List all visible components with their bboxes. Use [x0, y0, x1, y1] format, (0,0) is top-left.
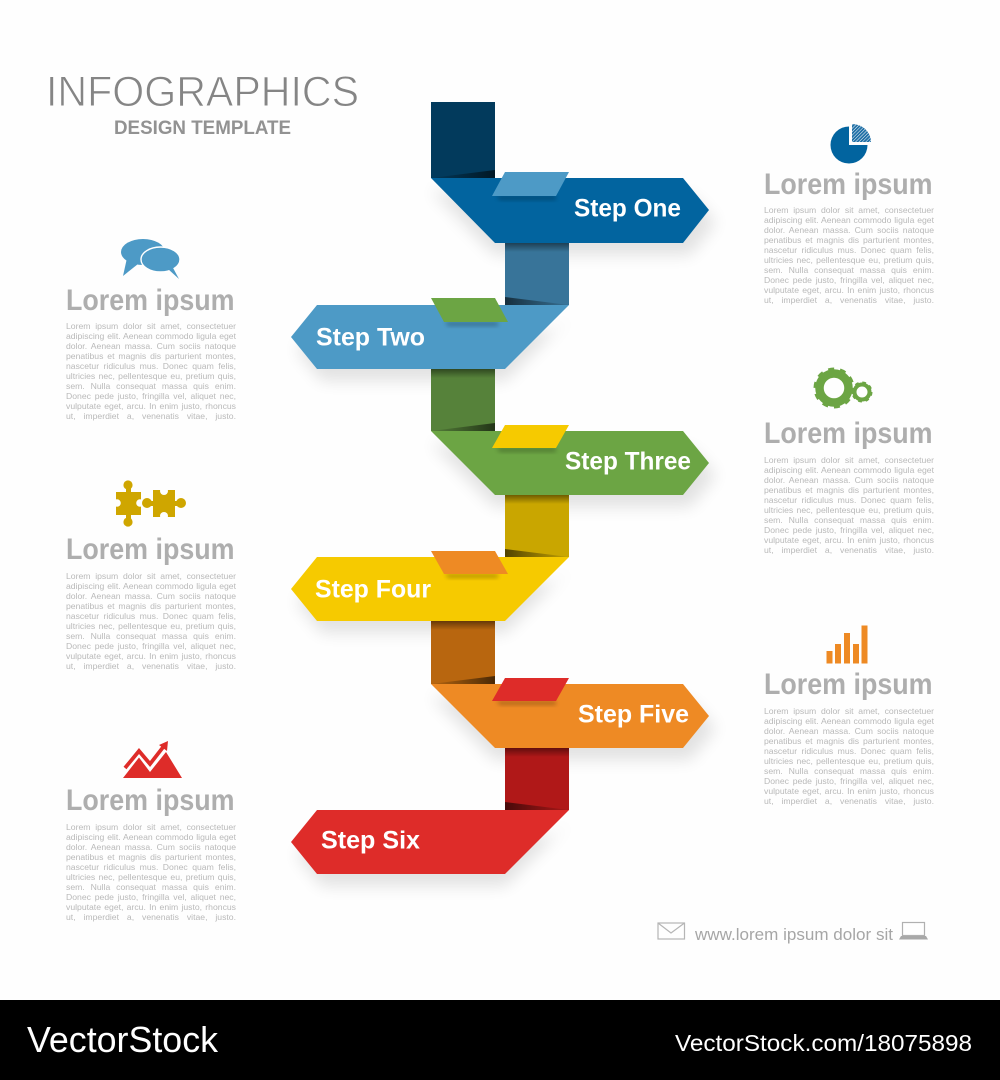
body text: dolor. Aenean massa. Cum sociis natoque	[66, 591, 236, 601]
panel: right block two	[764, 417, 934, 555]
body text: Donec pede justo, fringilla vel, aliquet nec,	[66, 391, 236, 401]
icon: gears	[816, 370, 871, 406]
heading: Lorem ipsum	[764, 168, 933, 201]
body text: penatibus et magnis dis parturient montes,	[764, 736, 934, 746]
panel: left block three	[66, 784, 236, 922]
body text: ultricies nec, pellentesque eu, pretium quis,	[764, 505, 934, 515]
body text: Lorem ipsum dolor sit amet, consectetuer	[66, 822, 236, 832]
body text	[764, 706, 934, 806]
body text: ut, imperdiet a, venenatis vitae, justo.	[66, 411, 236, 421]
arrow: step two: Step Two	[316, 324, 425, 352]
heading: Lorem ipsum	[764, 417, 933, 450]
icon: envelope	[658, 923, 684, 939]
body text: vulputate eget, arcu. In enim justo, rhoncus	[66, 651, 236, 661]
connector: red	[505, 748, 569, 810]
footer bar	[0, 1000, 1000, 1080]
step four	[291, 551, 569, 621]
arrow: step two	[291, 305, 569, 369]
body text: ut, imperdiet a, venenatis vitae, justo.	[764, 796, 934, 806]
step three	[431, 425, 709, 495]
body text: Donec pede justo, fringilla vel, aliquet nec,	[764, 275, 934, 285]
icon: puzzle pieces	[113, 480, 186, 527]
connector: blue	[505, 243, 569, 305]
panel: left block one	[66, 284, 236, 421]
body text: vulputate eget, arcu. In enim justo, rhoncus	[66, 902, 236, 912]
body text	[764, 455, 934, 555]
icon: laptop	[899, 922, 928, 940]
body text: dolor. Aenean massa. Cum sociis natoque	[66, 341, 236, 351]
body text: nascetur ridiculus mus. Donec quam felis,	[66, 862, 236, 872]
body text: sem. Nulla consequat massa quis enim.	[66, 381, 236, 391]
arrow: step four	[291, 557, 569, 621]
body text: adipiscing elit. Aenean commodo ligula eget	[66, 581, 236, 591]
step five	[431, 678, 709, 748]
footer bar: VectorStock.com/18075898	[675, 1030, 972, 1056]
icon: rising mountain chart	[123, 741, 182, 778]
tab: step two	[431, 298, 508, 326]
body text: Lorem ipsum dolor sit amet, consectetuer	[764, 706, 934, 716]
body text: sem. Nulla consequat massa quis enim.	[66, 882, 236, 892]
tab: step five	[492, 678, 569, 705]
arrow: step five: Step Five	[578, 700, 689, 728]
body text: ut, imperdiet a, venenatis vitae, justo.	[66, 661, 236, 671]
panel: right block three	[764, 668, 934, 806]
body text: dolor. Aenean massa. Cum sociis natoque	[764, 475, 934, 485]
arrow: step six: Step Six	[321, 826, 420, 854]
body text: penatibus et magnis dis parturient montes,	[764, 235, 934, 245]
body text: Lorem ipsum dolor sit amet, consectetuer	[764, 455, 934, 465]
body text: ultricies nec, pellentesque eu, pretium quis,	[66, 621, 236, 631]
body text: Lorem ipsum dolor sit amet, consectetuer	[66, 321, 236, 331]
body text: dolor. Aenean massa. Cum sociis natoque	[66, 842, 236, 852]
connector: orange	[431, 621, 495, 684]
body text: Donec pede justo, fringilla vel, aliquet nec,	[764, 525, 934, 535]
body text: nascetur ridiculus mus. Donec quam felis,	[764, 746, 934, 756]
body text: penatibus et magnis dis parturient montes,	[66, 852, 236, 862]
tab: step one	[492, 172, 569, 200]
icon: pie chart	[830, 124, 871, 164]
heading: Lorem ipsum	[66, 784, 235, 817]
drop shadows of the arrows	[296, 190, 716, 886]
arrow: step one	[431, 178, 709, 243]
heading: Lorem ipsum	[66, 533, 235, 566]
body text: adipiscing elit. Aenean commodo ligula eget	[764, 716, 934, 726]
body text: vulputate eget, arcu. In enim justo, rhoncus	[764, 285, 934, 295]
body text: sem. Nulla consequat massa quis enim.	[764, 265, 934, 275]
body text: vulputate eget, arcu. In enim justo, rhoncus	[764, 535, 934, 545]
body text: dolor. Aenean massa. Cum sociis natoque	[764, 726, 934, 736]
body text: adipiscing elit. Aenean commodo ligula eget	[764, 465, 934, 475]
body text: penatibus et magnis dis parturient montes,	[66, 601, 236, 611]
title: DESIGN TEMPLATE	[114, 117, 291, 139]
body text: sem. Nulla consequat massa quis enim.	[66, 631, 236, 641]
body text: vulputate eget, arcu. In enim justo, rhoncus	[764, 786, 934, 796]
step two	[291, 298, 569, 369]
tab: step three	[492, 425, 569, 452]
body text	[764, 205, 934, 305]
arrow: step five	[431, 684, 709, 748]
connector: yellow	[505, 495, 569, 557]
top ribbon	[431, 102, 495, 178]
body text	[66, 571, 236, 671]
arrow: step six	[291, 810, 569, 874]
body text: Donec pede justo, fringilla vel, aliquet nec,	[764, 776, 934, 786]
arrow: step four: Step Four	[315, 576, 431, 604]
body text: ut, imperdiet a, venenatis vitae, justo.	[66, 912, 236, 922]
body text: nascetur ridiculus mus. Donec quam felis,	[66, 611, 236, 621]
body text: adipiscing elit. Aenean commodo ligula eget	[764, 215, 934, 225]
contact url: www.lorem ipsum dolor sit	[694, 925, 893, 944]
title: INFOGRAPHICS	[46, 68, 359, 116]
footer bar: VectorStock	[27, 1019, 219, 1060]
arrow: step three	[431, 431, 709, 495]
body text: ultricies nec, pellentesque eu, pretium quis,	[66, 371, 236, 381]
heading: Lorem ipsum	[764, 668, 933, 701]
body text: penatibus et magnis dis parturient montes,	[764, 485, 934, 495]
body text: Donec pede justo, fringilla vel, aliquet nec,	[66, 641, 236, 651]
body text	[66, 321, 236, 421]
body text: ut, imperdiet a, venenatis vitae, justo.	[764, 295, 934, 305]
body text: ultricies nec, pellentesque eu, pretium quis,	[66, 872, 236, 882]
connector: green	[431, 369, 495, 431]
title	[46, 68, 359, 139]
heading: Lorem ipsum	[66, 284, 235, 317]
icon: speech bubbles	[121, 239, 180, 279]
body text: adipiscing elit. Aenean commodo ligula eget	[66, 832, 236, 842]
icon: bar chart	[826, 626, 868, 664]
arrow: step one: Step One	[574, 194, 681, 222]
body text: sem. Nulla consequat massa quis enim.	[764, 766, 934, 776]
body text: adipiscing elit. Aenean commodo ligula eget	[66, 331, 236, 341]
body text: nascetur ridiculus mus. Donec quam felis,	[66, 361, 236, 371]
body text: ut, imperdiet a, venenatis vitae, justo.	[764, 545, 934, 555]
body text: penatibus et magnis dis parturient montes,	[66, 351, 236, 361]
body text: nascetur ridiculus mus. Donec quam felis,	[764, 495, 934, 505]
body text: ultricies nec, pellentesque eu, pretium quis,	[764, 756, 934, 766]
panel: left block two	[66, 533, 236, 671]
body text: sem. Nulla consequat massa quis enim.	[764, 515, 934, 525]
body text: nascetur ridiculus mus. Donec quam felis,	[764, 245, 934, 255]
panel: right block one	[764, 168, 934, 305]
body text: Donec pede justo, fringilla vel, aliquet nec,	[66, 892, 236, 902]
body text	[66, 822, 236, 922]
tab: step four	[431, 551, 508, 578]
body text: vulputate eget, arcu. In enim justo, rhoncus	[66, 401, 236, 411]
body text: Lorem ipsum dolor sit amet, consectetuer	[66, 571, 236, 581]
step one: top ribbon and arrow	[431, 102, 709, 243]
body text: Lorem ipsum dolor sit amet, consectetuer	[764, 205, 934, 215]
body text: dolor. Aenean massa. Cum sociis natoque	[764, 225, 934, 235]
arrow: step three: Step Three	[565, 448, 691, 476]
body text: ultricies nec, pellentesque eu, pretium quis,	[764, 255, 934, 265]
